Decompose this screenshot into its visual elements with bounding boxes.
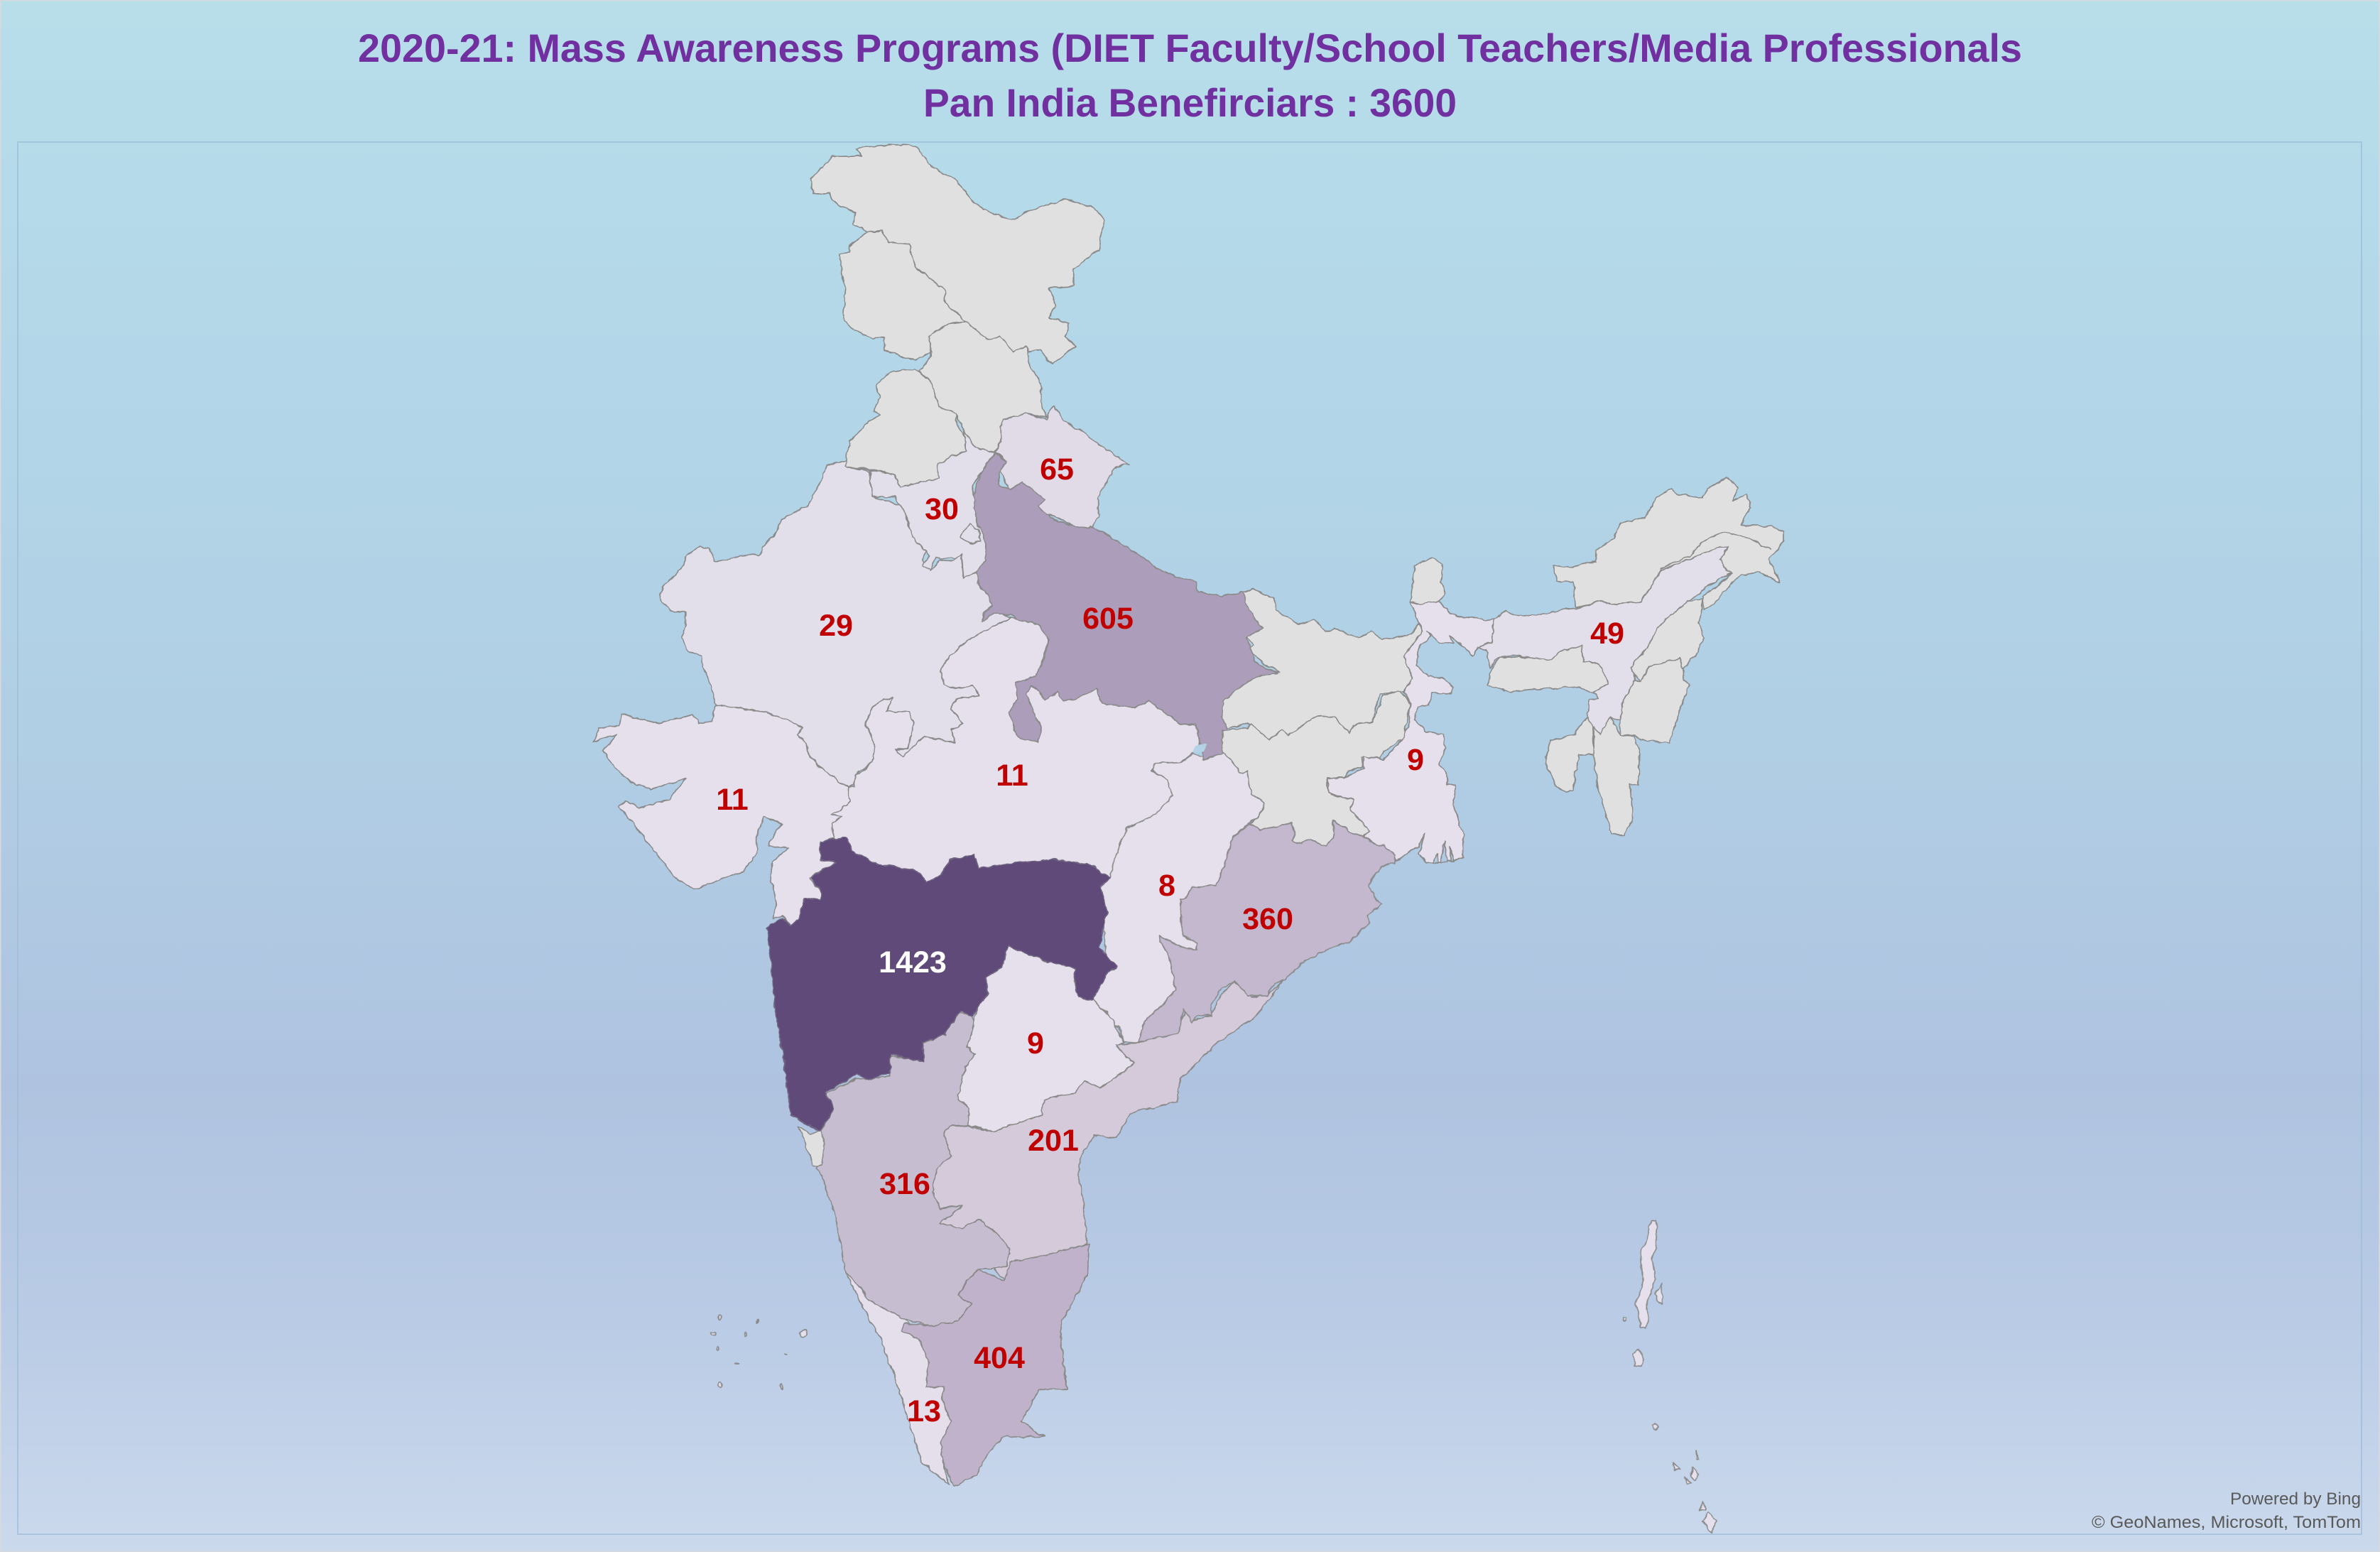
title: 2020-21: Mass Awareness Programs (DIET Faculty/School Teachers/Media Professionals [358, 26, 2022, 70]
state: Tamil Nadu [902, 1244, 1090, 1487]
map of India [594, 144, 1783, 1533]
value: Haryana: 30 [925, 492, 959, 526]
state: Himachal Pradesh [919, 322, 1047, 452]
value: Rajasthan: 29 [819, 609, 853, 643]
state: Haryana [845, 428, 994, 578]
state: Chhattisgarh [1091, 749, 1265, 1043]
state: Assam [1477, 547, 1732, 734]
state: Sikkim [1411, 558, 1446, 604]
title [358, 26, 2022, 125]
state: West Bengal [1327, 602, 1494, 862]
state: Ladakh [811, 144, 1104, 364]
islands: Andaman and Nicobar [1623, 1220, 1717, 1533]
state: Goa [798, 1127, 824, 1165]
state: Punjab [845, 369, 966, 487]
state: Jharkhand [1222, 691, 1411, 847]
title: Pan India Benefirciars : 3600 [923, 80, 1457, 125]
state: Uttarakhand [994, 405, 1129, 531]
value: Assam: 49 [1590, 617, 1624, 651]
value: Uttar Pradesh: 605 [1082, 602, 1134, 636]
state: Andhra Pradesh [933, 980, 1284, 1281]
state: Kerala [845, 1271, 951, 1485]
state: Odisha [1139, 820, 1396, 1042]
state: Maharashtra [767, 837, 1117, 1132]
attribution: Powered by Bing [2230, 1489, 2361, 1509]
state: Telangana [958, 945, 1135, 1131]
value: Tamil Nadu: 404 [974, 1341, 1025, 1375]
state: Meghalaya [1488, 646, 1608, 693]
value: West Bengal: 9 [1407, 743, 1424, 777]
state: Madhya Pradesh [832, 618, 1201, 894]
value: Gujarat: 11 [716, 783, 749, 817]
state: Bihar [1221, 589, 1423, 740]
state: Mizoram [1594, 717, 1640, 835]
state: Jammu and Kashmir [839, 231, 966, 361]
value: Andhra Pradesh: 201 [1028, 1124, 1079, 1158]
islands: Lakshadweep [711, 1314, 807, 1389]
state: Delhi [960, 523, 980, 543]
state: Gujarat [594, 705, 849, 926]
data labels [716, 452, 1624, 1428]
attribution [2092, 1489, 2361, 1532]
state: Nagaland [1631, 599, 1704, 682]
value: Chhattisgarh: 8 [1158, 869, 1175, 903]
value: Madhya Pradesh: 11 [996, 759, 1028, 793]
value: Odisha: 360 [1242, 902, 1293, 936]
delta inlets: Sundarbans [1433, 840, 1454, 862]
state: Manipur [1620, 658, 1690, 743]
state: Arunachal Pradesh [1553, 478, 1783, 609]
state: Rajasthan [659, 461, 1011, 787]
lake: Rihand reservoir [1193, 744, 1208, 752]
value: Maharashtra: 1423 [879, 945, 947, 980]
value: Karnataka: 316 [879, 1167, 930, 1201]
attribution: © GeoNames, Microsoft, TomTom [2092, 1513, 2361, 1532]
border line: northern Arunachal [1661, 532, 1771, 569]
state: Uttar Pradesh [973, 453, 1278, 760]
state: Karnataka [817, 1013, 1010, 1326]
value: Kerala: 13 [907, 1394, 941, 1428]
state: Tripura [1545, 717, 1594, 792]
value: Uttarakhand: 65 [1040, 452, 1074, 487]
value: Telangana: 9 [1027, 1026, 1044, 1060]
